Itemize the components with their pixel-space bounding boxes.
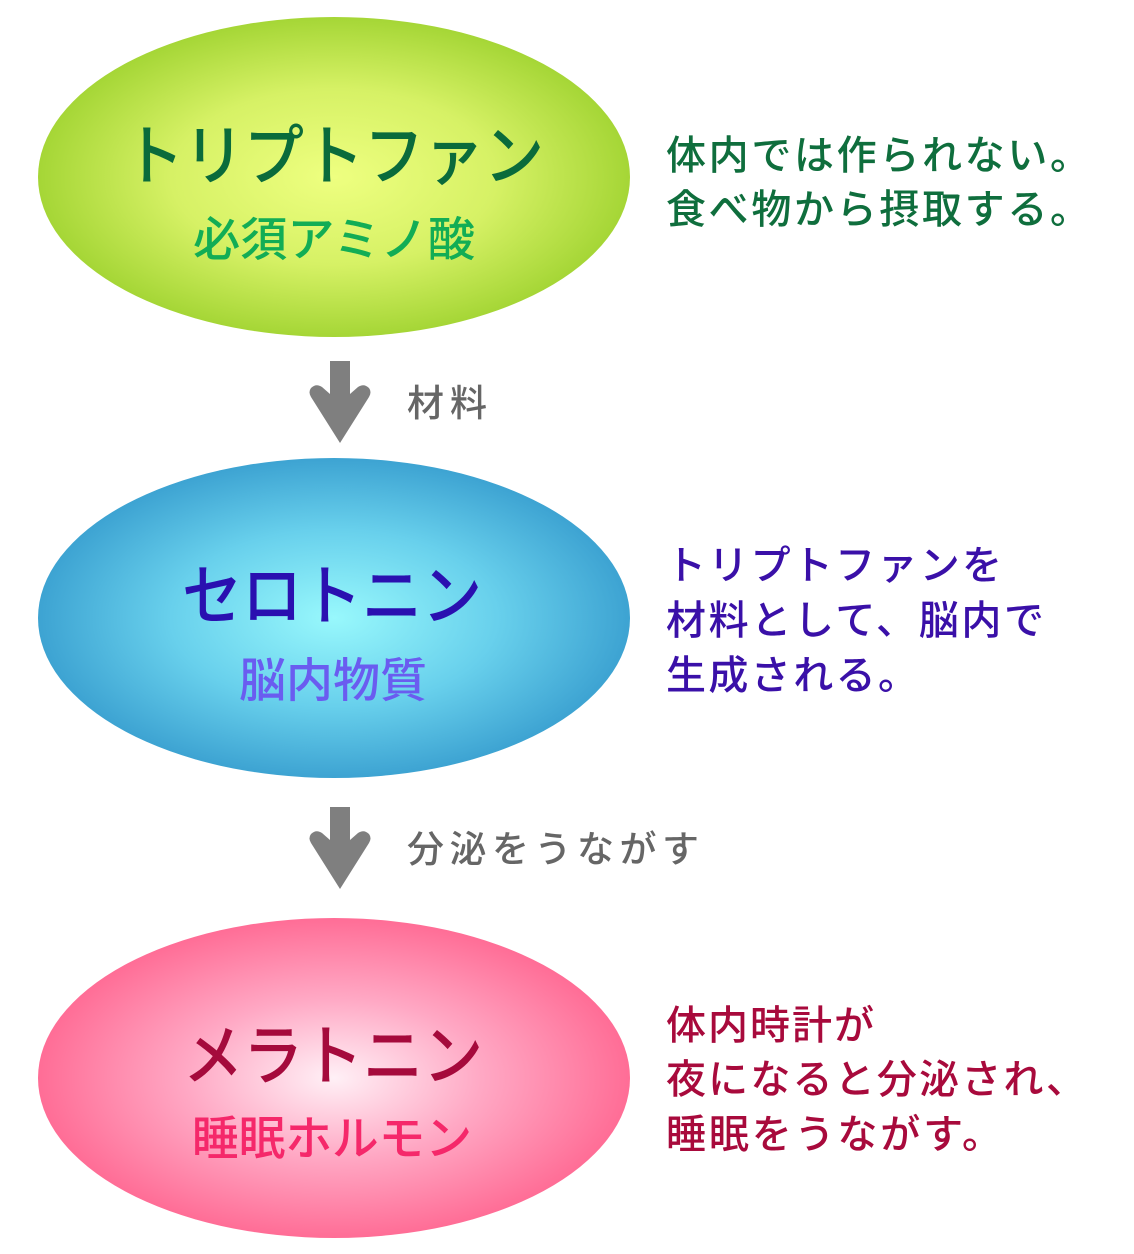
text block: serotonin description: トリプトファンを xyxy=(666,544,1002,588)
subheading: brain substance: 脳内物質 xyxy=(239,654,427,707)
text block: tryptophan description: 体内では作られない。 xyxy=(666,134,1090,178)
panel: tryptophan ellipse xyxy=(38,17,630,337)
text block: serotonin description: 材料として、脳内で xyxy=(666,599,1044,643)
panel: melatonin ellipse xyxy=(38,918,630,1238)
text block: serotonin description: 生成される。 xyxy=(666,654,918,698)
arrow: material xyxy=(310,361,370,443)
label: material: 材料 xyxy=(407,383,487,424)
subheading: essential amino acid: 必須アミノ酸 xyxy=(193,213,475,266)
text block: melatonin description: 体内時計が xyxy=(666,1004,874,1048)
text block: melatonin description xyxy=(666,1004,1086,1157)
text block: serotonin description xyxy=(666,544,1044,698)
text block: melatonin description: 睡眠をうながす。 xyxy=(666,1113,1002,1157)
heading: serotonin: セロトニン xyxy=(182,559,482,633)
text block: tryptophan description xyxy=(666,134,1090,232)
panel: serotonin ellipse xyxy=(38,458,630,778)
label: promotes secretion: 分泌をうながす xyxy=(407,829,699,870)
heading: tryptophan: トリプトファン xyxy=(124,119,544,193)
heading: melatonin: メラトニン xyxy=(183,1019,483,1093)
subheading: sleep hormone: 睡眠ホルモン xyxy=(192,1112,472,1165)
arrow: promotes secretion xyxy=(310,807,370,889)
text block: tryptophan description: 食べ物から摂取する。 xyxy=(666,188,1090,232)
text block: melatonin description: 夜になると分泌され、 xyxy=(666,1058,1086,1102)
